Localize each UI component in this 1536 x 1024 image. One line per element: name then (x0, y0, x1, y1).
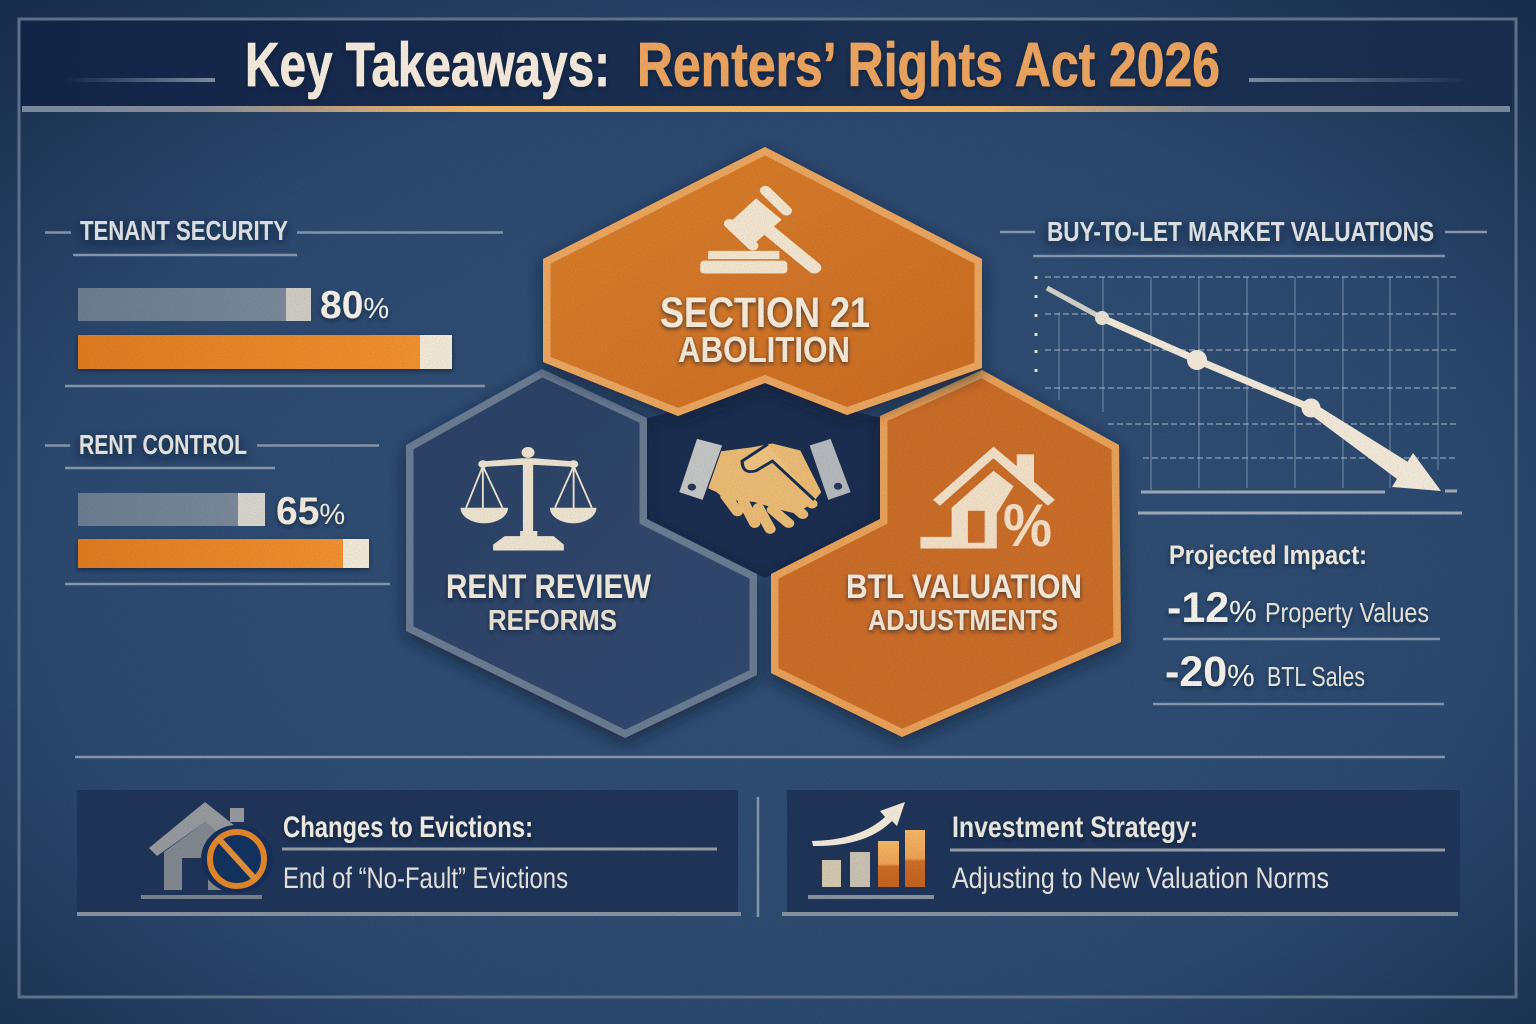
stat: btl sales: -20% (1165, 648, 1255, 696)
icon: rising bar chart (808, 802, 934, 899)
text: adjusting to new valuation norms: Adjusting to New Valuation Norms (952, 862, 1329, 895)
hexagon: section 21 abolition (543, 147, 982, 416)
panel: rent control (45, 429, 390, 584)
value: 65%: 65% (276, 490, 345, 533)
stat: property values: Property Values (1265, 597, 1429, 628)
centre dark backing (640, 383, 890, 578)
bar: grey 80 (78, 288, 311, 321)
stat: property values (1167, 584, 1429, 632)
panel: tenant security (45, 215, 503, 386)
stat: btl sales: BTL Sales (1267, 661, 1365, 692)
text: end of no-fault evictions: End of “No-Fault” Evictions (283, 862, 568, 895)
heading: buy-to-let: BUY-TO-LET MARKET VALUATIONS (1047, 216, 1434, 247)
icon: gavel (700, 191, 814, 273)
heading: tenant security: TENANT SECURITY (80, 215, 288, 246)
bar: orange 65 (78, 539, 369, 568)
hexagon: rent review reforms (406, 369, 757, 738)
text: changes to evictions: Changes to Evictions: (283, 811, 533, 844)
label: section 21: SECTION 21 (660, 289, 870, 337)
panel: buy-to-let market valuations (1000, 216, 1487, 704)
label: reforms: REFORMS (488, 605, 617, 637)
title (245, 31, 1220, 100)
heading: projected impact: Projected Impact: (1169, 540, 1367, 570)
label: abolition: ABOLITION (678, 329, 850, 370)
bar: grey 65 (78, 493, 265, 526)
heading: rent control: RENT CONTROL (79, 429, 247, 460)
icon: handshake (679, 439, 851, 529)
panel: investment strategy (782, 790, 1460, 914)
value: 80%: 80% (320, 284, 389, 327)
label: adjustments: ADJUSTMENTS (868, 605, 1058, 637)
stat: property values: -12% (1167, 584, 1257, 632)
icon: house with prohibition sign (141, 802, 273, 899)
label: btl valuation: BTL VALUATION (846, 568, 1082, 606)
icon: scales (461, 447, 596, 551)
icon: house with percent: % (1003, 492, 1052, 559)
line chart (1036, 276, 1462, 513)
bar: orange 80 (78, 335, 452, 369)
hexagon: btl valuation adjustments (771, 370, 1121, 737)
icon: house with percent (920, 447, 1055, 559)
title: act name: Renters’ Rights Act 2026 (637, 31, 1220, 100)
panel: changes to evictions (77, 790, 741, 914)
text: investment strategy: Investment Strategy: (952, 811, 1198, 844)
stat: btl sales (1165, 648, 1365, 696)
title: key takeaways: Key Takeaways: (245, 31, 610, 100)
label: rent review: RENT REVIEW (446, 568, 652, 606)
